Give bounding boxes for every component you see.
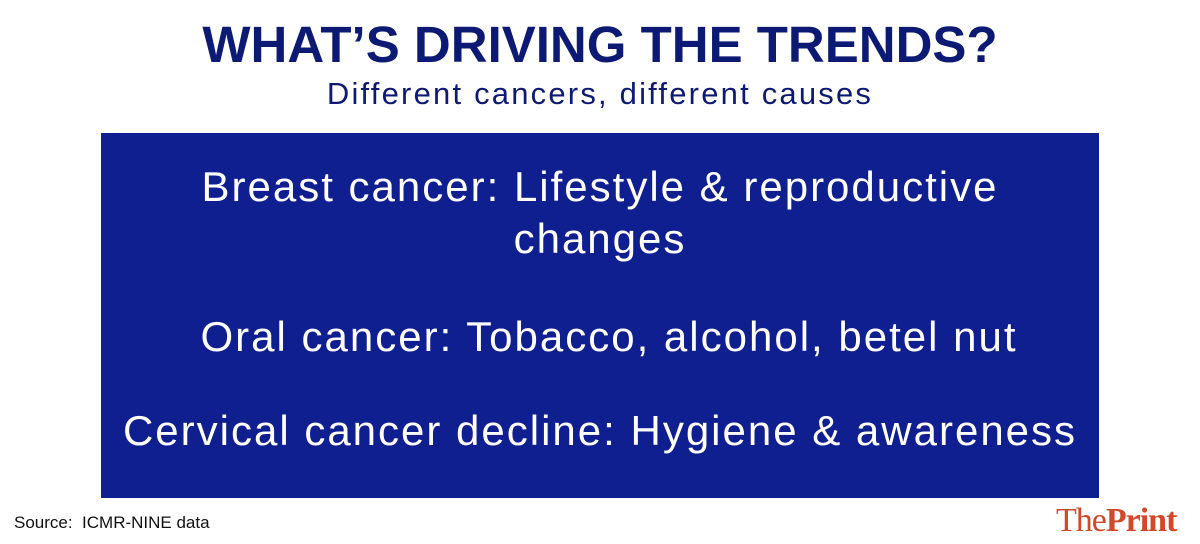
source: Source: ICMR-NINE data [14,513,210,532]
logo: ThePrint [1056,502,1176,539]
text: cervical cancer: Cervical cancer decline: Hygiene & awareness [123,407,1077,454]
title: WHAT’S DRIVING THE TRENDS? [202,16,998,73]
text: breast cancer [201,163,998,262]
subtitle: Different cancers, different causes [327,76,873,111]
text: oral cancer: Oral cancer: Tobacco, alcohol, betel nut [200,313,1018,360]
text: breast cancer: Breast cancer: Lifestyle & reproductive [201,163,998,210]
panel: causes [101,133,1099,498]
text: breast cancer: changes [514,215,686,262]
